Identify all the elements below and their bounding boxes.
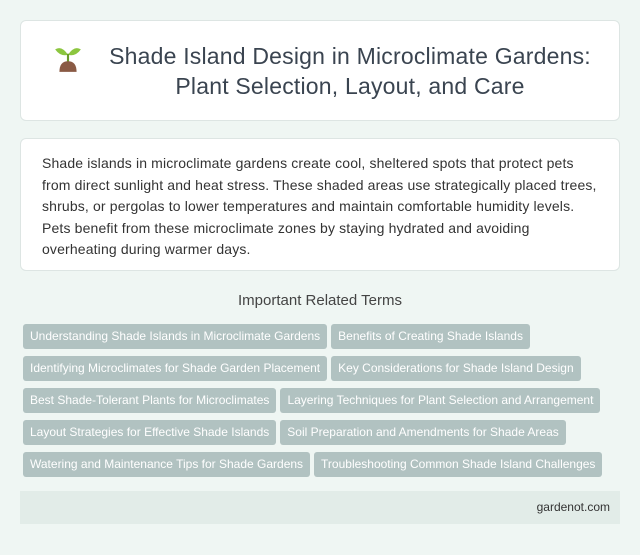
title: Shade Island Design in Microclimate Gardens: Plant Selection, Layout, and Care (109, 43, 591, 99)
tags: Soil Preparation and Amendments for Shade Areas (287, 425, 559, 439)
tags: Troubleshooting Common Shade Island Challenges (321, 457, 595, 471)
description card: from direct sunlight and heat stress. These shaded areas use strategically placed trees, (42, 176, 597, 192)
tags: Layering Techniques for Plant Selection and Arrangement (287, 393, 593, 407)
description card (20, 138, 620, 271)
tags (23, 324, 602, 477)
title card (20, 20, 620, 121)
description card: Pets benefit from these microclimate zones by staying hydrated and avoiding (42, 220, 530, 236)
heading: related terms: Important Related Terms (238, 292, 402, 309)
tags: Benefits of Creating Shade Islands (338, 329, 523, 343)
description card: Shade islands in microclimate gardens create cool, sheltered spots that protect pets (42, 155, 574, 171)
icon: sprout (55, 48, 81, 72)
footer (20, 491, 620, 524)
description card: shrubs, or pergolas to lower temperatures and maintain comfortable humidity levels. (42, 198, 574, 214)
tags: Best Shade-Tolerant Plants for Microclimates (30, 393, 269, 407)
tags: Layout Strategies for Effective Shade Islands (30, 425, 269, 439)
description card: overheating during warmer days. (42, 241, 251, 257)
footer: gardenot.com (537, 500, 610, 514)
tags: Understanding Shade Islands in Microclimate Gardens (30, 329, 320, 343)
tags: Key Considerations for Shade Island Design (338, 361, 574, 375)
tags: Watering and Maintenance Tips for Shade Gardens (30, 457, 303, 471)
tags: Identifying Microclimates for Shade Garden Placement (30, 361, 320, 375)
